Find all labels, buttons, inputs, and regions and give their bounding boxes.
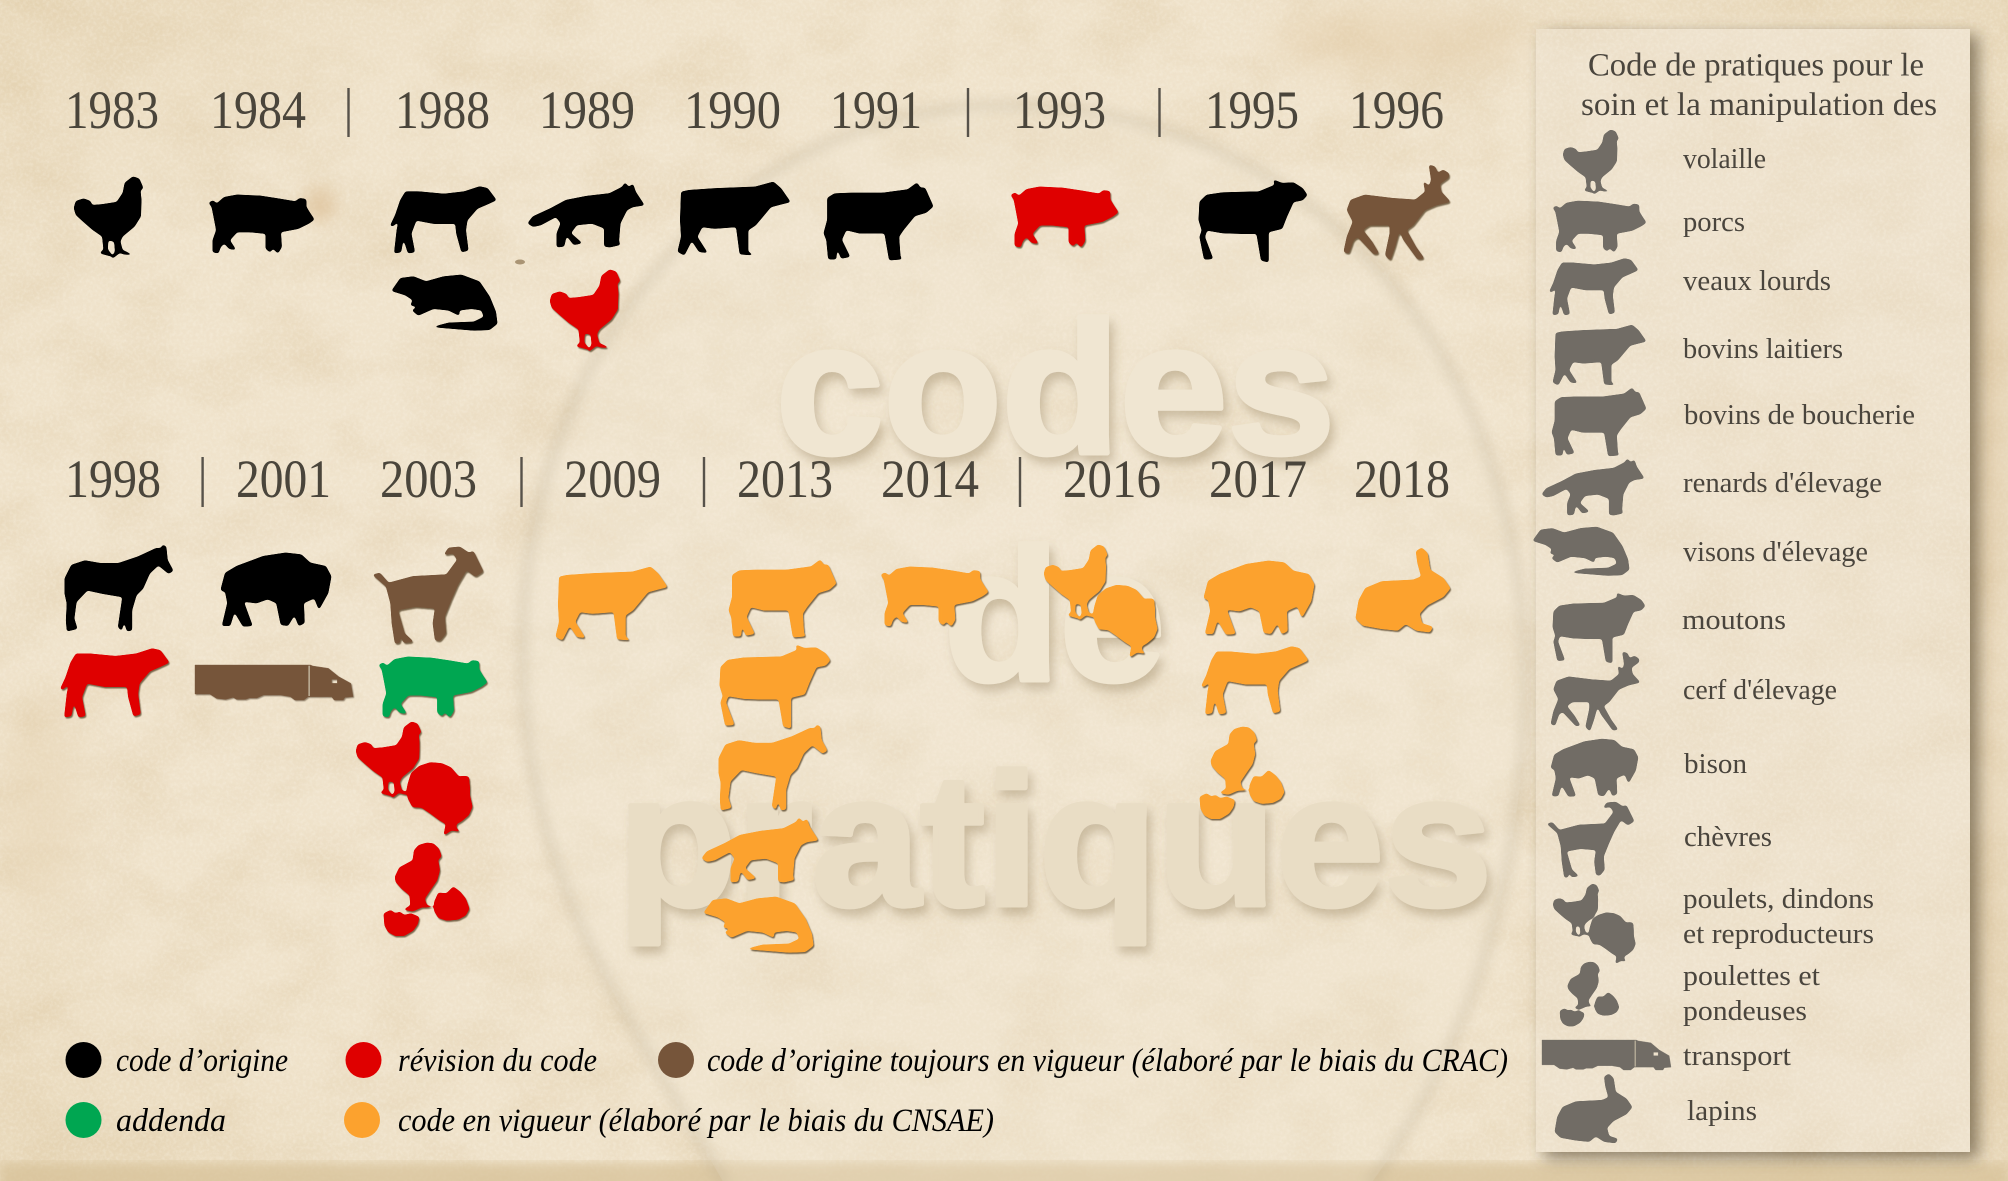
watermark: de: de: [944, 510, 1165, 720]
watermark: codes: codes: [776, 283, 1335, 493]
key icon: rabbit: [1555, 1074, 1632, 1143]
icon: chick and eggs revision 2003: [384, 843, 469, 936]
icon: horse 2013: [719, 725, 827, 810]
timeline row 1 years: 1988: [395, 80, 490, 140]
legend: original code: [66, 1042, 288, 1079]
panel heading: [1581, 48, 1937, 123]
icon: bison 2017: [1204, 561, 1314, 634]
key label: porcs: porcs: [1683, 206, 1745, 238]
legend: [66, 1042, 1508, 1139]
timeline row 2 years: 2017: [1209, 449, 1307, 509]
key label: poulettes et pondeuses: poulettes et: [1683, 960, 1820, 992]
timeline row 1 years: 1995: [1205, 80, 1299, 140]
key icon: pullets and layers: [1560, 962, 1619, 1026]
timeline row 1 years: [65, 80, 1444, 140]
key icon: goat: [1547, 802, 1634, 877]
timeline row 2 years: [65, 449, 1450, 509]
icon: sheep 2013: [720, 645, 830, 728]
icon: chicken and turkey revision 2003: [356, 722, 472, 835]
key icon: fox: [1542, 459, 1644, 515]
icon: beef cattle 1991: [824, 183, 933, 260]
icon: bison 2001: [221, 553, 331, 626]
icon: beef cattle 2013: [729, 560, 836, 637]
icon: calf revision 1998: [61, 649, 169, 717]
key label: poulets, dindons et reproducteurs: [1683, 883, 1874, 950]
icon: calf 2017: [1202, 647, 1308, 714]
key label: moutons: moutons: [1682, 604, 1786, 636]
timeline row 2 years: 2009: [564, 449, 661, 509]
key label: volaille: volaille: [1683, 143, 1766, 175]
key icon: pigs: [1553, 201, 1646, 252]
key label: poulets, dindons et reproducteurs: poulets, dindons: [1683, 883, 1874, 915]
icon: pig revision 1993: [1011, 187, 1118, 247]
timeline row 2 years: 2001: [236, 449, 331, 509]
icon: pig addendum 2003: [379, 657, 487, 717]
watermark: pratiques: pratiques: [618, 735, 1492, 945]
icon: mink 2013: [704, 897, 813, 952]
timeline row 2 years: 2003: [380, 449, 477, 509]
timeline row 1 years: 1989: [539, 80, 635, 140]
icon: chicken 1983: [74, 177, 143, 258]
panel: species key: [1533, 29, 1978, 1158]
icon: fox 2013: [702, 818, 818, 882]
key icon: sheep: [1553, 593, 1645, 663]
key icon: dairy cattle: [1553, 325, 1646, 385]
key label: bovins de boucherie: bovins de boucherie: [1684, 399, 1915, 431]
key icon: bison: [1551, 739, 1638, 796]
timeline row 1 years: 1993: [1013, 80, 1106, 140]
key icon: chickens and turkeys: [1553, 884, 1635, 964]
legend: original code: code d’origine: [116, 1043, 288, 1079]
key icon: deer: [1551, 652, 1640, 731]
timeline row 2 years: 2016: [1063, 449, 1161, 509]
icon: pig 2014: [881, 567, 988, 626]
icon: chick and eggs 2017: [1200, 727, 1284, 819]
key label: chèvres: chèvres: [1684, 821, 1772, 853]
icon: dairy cow 2009: [556, 567, 667, 640]
panel heading: soin et la manipulation des: [1581, 87, 1937, 123]
icon: pig 1984: [209, 195, 314, 253]
timeline row 1 years: 1984: [210, 80, 306, 140]
timeline row 2 years: 2018: [1354, 449, 1450, 509]
faded ring behind watermark: [522, 105, 1525, 1181]
key icon: veal: [1549, 259, 1638, 315]
key label: lapins: lapins: [1687, 1095, 1757, 1127]
timeline row 2 years: 1998: [65, 449, 161, 509]
icon: goat 2003: [373, 547, 483, 643]
icon: chicken revision 1989: [550, 270, 620, 351]
key icon: truck: [1542, 1040, 1671, 1070]
legend: code revision: révision du code: [398, 1043, 597, 1079]
timeline row 1 years: 1990: [684, 80, 781, 140]
key label: poulets, dindons et reproducteurs: et reproducteurs: [1683, 918, 1874, 950]
key label: cerf d'élevage: cerf d'élevage: [1683, 674, 1837, 706]
key icon: beef cattle: [1552, 388, 1646, 456]
key label: bison: bison: [1684, 748, 1748, 780]
timeline row 1 years: 1983: [65, 80, 159, 140]
timeline row 2 years: 2013: [737, 449, 833, 509]
key icon: poultry: [1563, 130, 1618, 194]
key label: bovins laitiers: bovins laitiers: [1683, 333, 1843, 365]
timeline row 1 years: 1991: [830, 80, 922, 140]
timeline row 2 years: 2014: [881, 449, 979, 509]
legend: original code still in force: code d’origine toujours en vigueur (élaboré par le biais du CRAC): [707, 1043, 1508, 1079]
icon: truck 2001: [195, 665, 353, 700]
timeline row 1 icons: [74, 165, 1450, 351]
icon: horse 1998: [65, 545, 173, 631]
timeline row 1 years: 1996: [1349, 80, 1444, 140]
icon: chicken and turkey 2016: [1044, 545, 1157, 657]
panel heading: Code de pratiques pour le: [1588, 48, 1924, 84]
timeline row 2 icons: [61, 545, 1450, 952]
key label: visons d'élevage: visons d'élevage: [1683, 536, 1868, 568]
icon: deer 1996: [1344, 165, 1450, 260]
key label: transport: transport: [1683, 1040, 1791, 1072]
icon: rabbit 2018: [1356, 548, 1450, 632]
icon: calf 1988: [391, 187, 496, 253]
key label: renards d'élevage: renards d'élevage: [1683, 467, 1882, 499]
icon: fox 1989: [528, 183, 644, 247]
icon: sheep 1995: [1199, 180, 1307, 262]
key label: poulettes et pondeuses: pondeuses: [1683, 995, 1807, 1027]
legend: code in force: code en vigueur (élaboré par le biais du CNSAE): [398, 1103, 994, 1139]
icon: dairy cow 1990: [678, 182, 790, 255]
legend: addenda: [66, 1102, 226, 1139]
key label: veaux lourds: veaux lourds: [1683, 265, 1831, 297]
key label: poulettes et pondeuses: [1683, 960, 1820, 1027]
icon: mink 1988: [392, 275, 497, 330]
key icon: mink: [1533, 527, 1629, 575]
legend: addenda: addenda: [116, 1103, 226, 1139]
